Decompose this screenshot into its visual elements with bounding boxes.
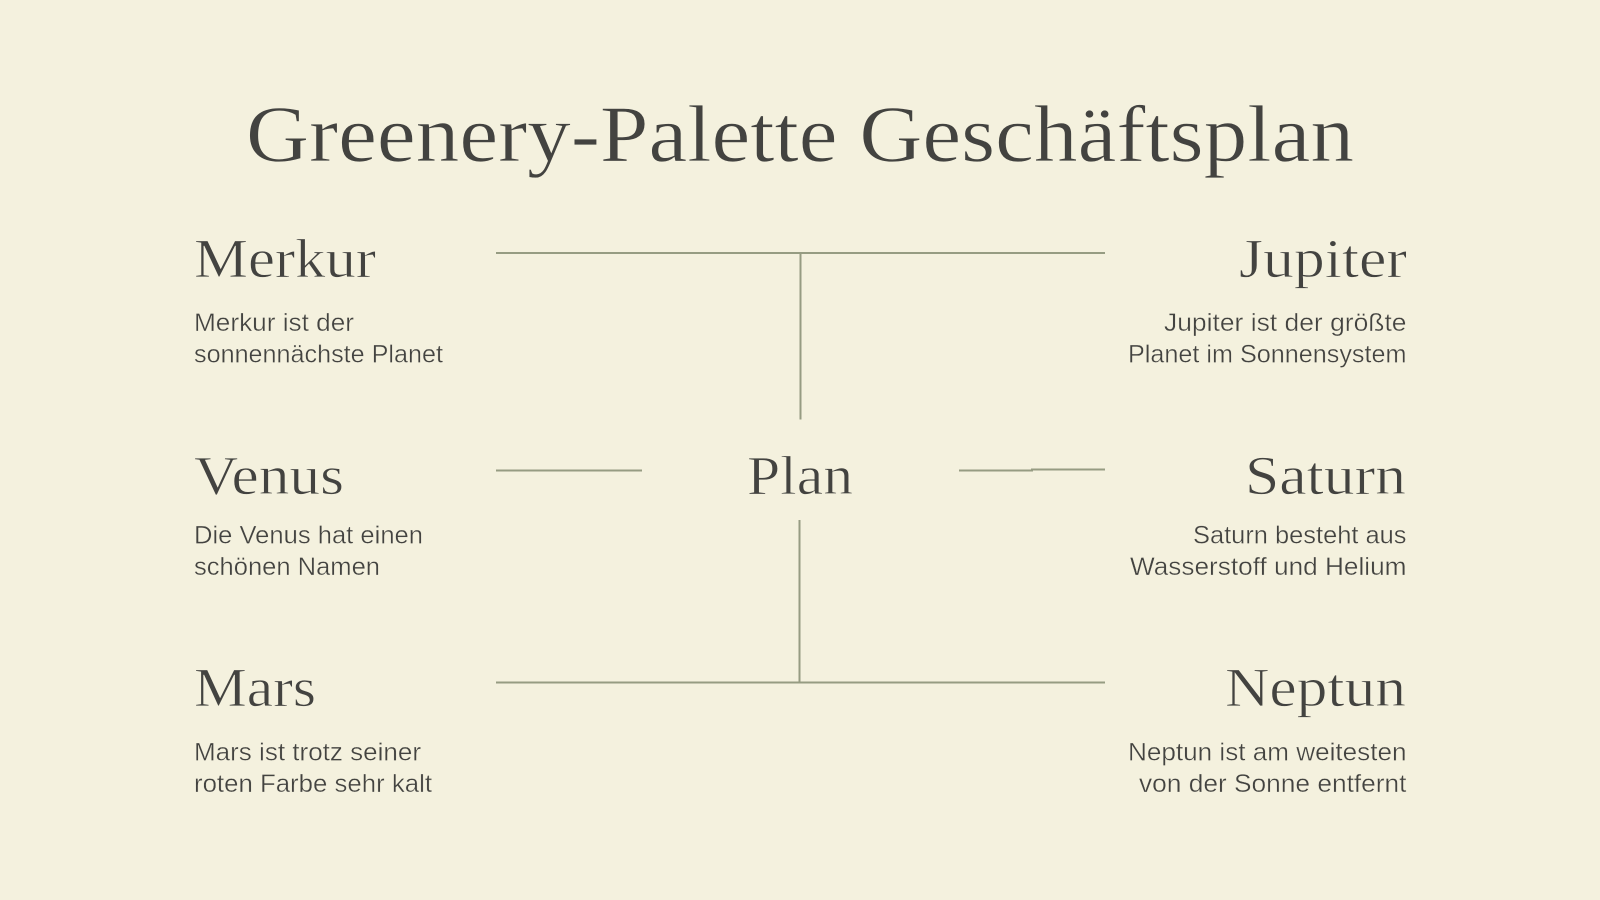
heading: Merkur: Merkur xyxy=(194,228,376,289)
item: Merkur xyxy=(194,228,443,368)
connector: left middle xyxy=(496,470,642,472)
text: Saturn description: Saturn besteht aus xyxy=(1193,522,1406,550)
heading: Jupiter: Jupiter xyxy=(1239,228,1407,289)
text: Jupiter description: Jupiter ist der größte xyxy=(1164,309,1406,337)
connector: top branch xyxy=(496,253,1105,420)
text: Merkur description: sonnennächste Planet xyxy=(194,340,443,368)
text: Mars description: Mars ist trotz seiner xyxy=(194,738,421,766)
text: Saturn description: Wasserstoff und Helium xyxy=(1130,553,1406,581)
item: Jupiter xyxy=(1128,228,1407,368)
heading: Saturn: Saturn xyxy=(1245,445,1406,506)
text: Saturn description xyxy=(1130,522,1406,581)
text: Mars description: roten Farbe sehr kalt xyxy=(194,770,432,798)
text: Jupiter description: Planet im Sonnensystem xyxy=(1128,340,1406,368)
text: Neptun description: von der Sonne entfernt xyxy=(1139,770,1407,798)
text: Jupiter description xyxy=(1128,309,1406,368)
heading: Mars: Mars xyxy=(194,657,316,718)
text: Venus description xyxy=(194,522,423,581)
connector: right middle xyxy=(959,470,1105,471)
text: Venus description: Die Venus hat einen xyxy=(194,522,423,550)
item: Mars xyxy=(194,657,432,798)
text: Venus description: schönen Namen xyxy=(194,553,380,581)
item: Venus xyxy=(194,445,423,581)
heading: Neptun: Neptun xyxy=(1225,657,1406,718)
text: Neptun description xyxy=(1128,738,1407,798)
item: Saturn xyxy=(1130,445,1406,581)
central label: Plan: Plan xyxy=(747,445,853,506)
title: Greenery-Palette Geschäftsplan xyxy=(246,89,1354,179)
text: Neptun description: Neptun ist am weitesten xyxy=(1128,738,1406,766)
connector lines xyxy=(496,253,1105,682)
text: Merkur description xyxy=(194,309,443,368)
text: Merkur description: Merkur ist der xyxy=(194,309,354,337)
heading: Venus: Venus xyxy=(194,445,344,506)
item: Neptun xyxy=(1128,657,1407,798)
text: Mars description xyxy=(194,738,432,798)
connector: bottom branch xyxy=(496,520,1105,682)
